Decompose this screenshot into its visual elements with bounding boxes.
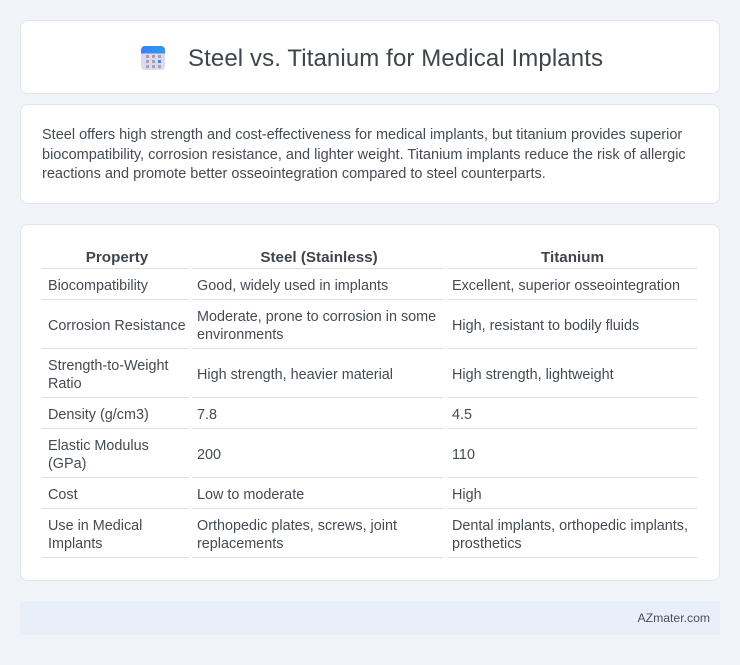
row: strength-to-weight ratio bbox=[48, 358, 614, 392]
row: cost: High bbox=[452, 487, 482, 503]
row: use in medical implants bbox=[48, 518, 688, 552]
row: corrosion resistance: Moderate, prone to corrosion in some bbox=[197, 309, 436, 325]
row: elastic modulus: Elastic Modulus bbox=[48, 438, 149, 454]
table header: Titanium bbox=[541, 249, 604, 266]
row: density: 7.8 bbox=[197, 407, 217, 423]
row: use in medical implants: Dental implants, orthopedic implants, bbox=[452, 518, 688, 534]
panel: title card bbox=[20, 20, 720, 94]
intro paragraph bbox=[42, 127, 686, 182]
panel: comparison table card bbox=[20, 224, 720, 581]
intro paragraph: Steel offers high strength and cost-effectiveness for medical implants, but titanium provides superior bbox=[42, 127, 682, 143]
row: elastic modulus bbox=[48, 438, 475, 472]
row: density: Density (g/cm3) bbox=[48, 407, 149, 423]
row: biocompatibility: Biocompatibility bbox=[48, 278, 148, 294]
title: Steel vs. Titanium for Medical Implants bbox=[188, 45, 603, 72]
table header: Property bbox=[86, 249, 148, 266]
footer credit: AZmater.com bbox=[638, 611, 710, 625]
row: corrosion resistance: High, resistant to bodily fluids bbox=[452, 318, 639, 334]
row: corrosion resistance: environments bbox=[197, 327, 283, 343]
row: elastic modulus: 110 bbox=[452, 447, 475, 463]
row: use in medical implants: Orthopedic plates, screws, joint bbox=[197, 518, 397, 534]
row: density bbox=[48, 407, 472, 423]
table header: Steel (Stainless) bbox=[260, 249, 378, 266]
intro paragraph: reactions and promote better osseointegration compared to steel counterparts. bbox=[42, 166, 546, 182]
row: corrosion resistance bbox=[48, 309, 639, 343]
row: corrosion resistance: Corrosion Resistance bbox=[48, 318, 186, 334]
row: cost: Low to moderate bbox=[197, 487, 304, 503]
row: strength-to-weight ratio: High strength, heavier material bbox=[197, 367, 393, 383]
row: elastic modulus: (GPa) bbox=[48, 456, 86, 472]
row: use in medical implants: Implants bbox=[48, 536, 102, 552]
panel: intro text bbox=[20, 104, 720, 204]
row: cost bbox=[48, 487, 482, 503]
row: biocompatibility bbox=[48, 278, 680, 294]
row: strength-to-weight ratio: High strength, lightweight bbox=[452, 367, 614, 383]
row: use in medical implants: Use in Medical bbox=[48, 518, 142, 534]
row: biocompatibility: Excellent, superior osseointegration bbox=[452, 278, 680, 294]
table header bbox=[86, 249, 604, 266]
intro paragraph: biocompatibility, corrosion resistance, and lighter weight. Titanium implants reduce the risk of allergic bbox=[42, 146, 686, 162]
row: cost: Cost bbox=[48, 487, 78, 503]
row: density: 4.5 bbox=[452, 407, 472, 423]
row: strength-to-weight ratio: Ratio bbox=[48, 376, 82, 392]
row: elastic modulus: 200 bbox=[197, 447, 221, 463]
row: biocompatibility: Good, widely used in implants bbox=[197, 278, 388, 294]
icon: calendar bbox=[141, 46, 165, 70]
footer bar bbox=[20, 601, 720, 635]
row: use in medical implants: replacements bbox=[197, 536, 283, 552]
row: strength-to-weight ratio: Strength-to-Weight bbox=[48, 358, 169, 374]
row: use in medical implants: prosthetics bbox=[452, 536, 522, 552]
